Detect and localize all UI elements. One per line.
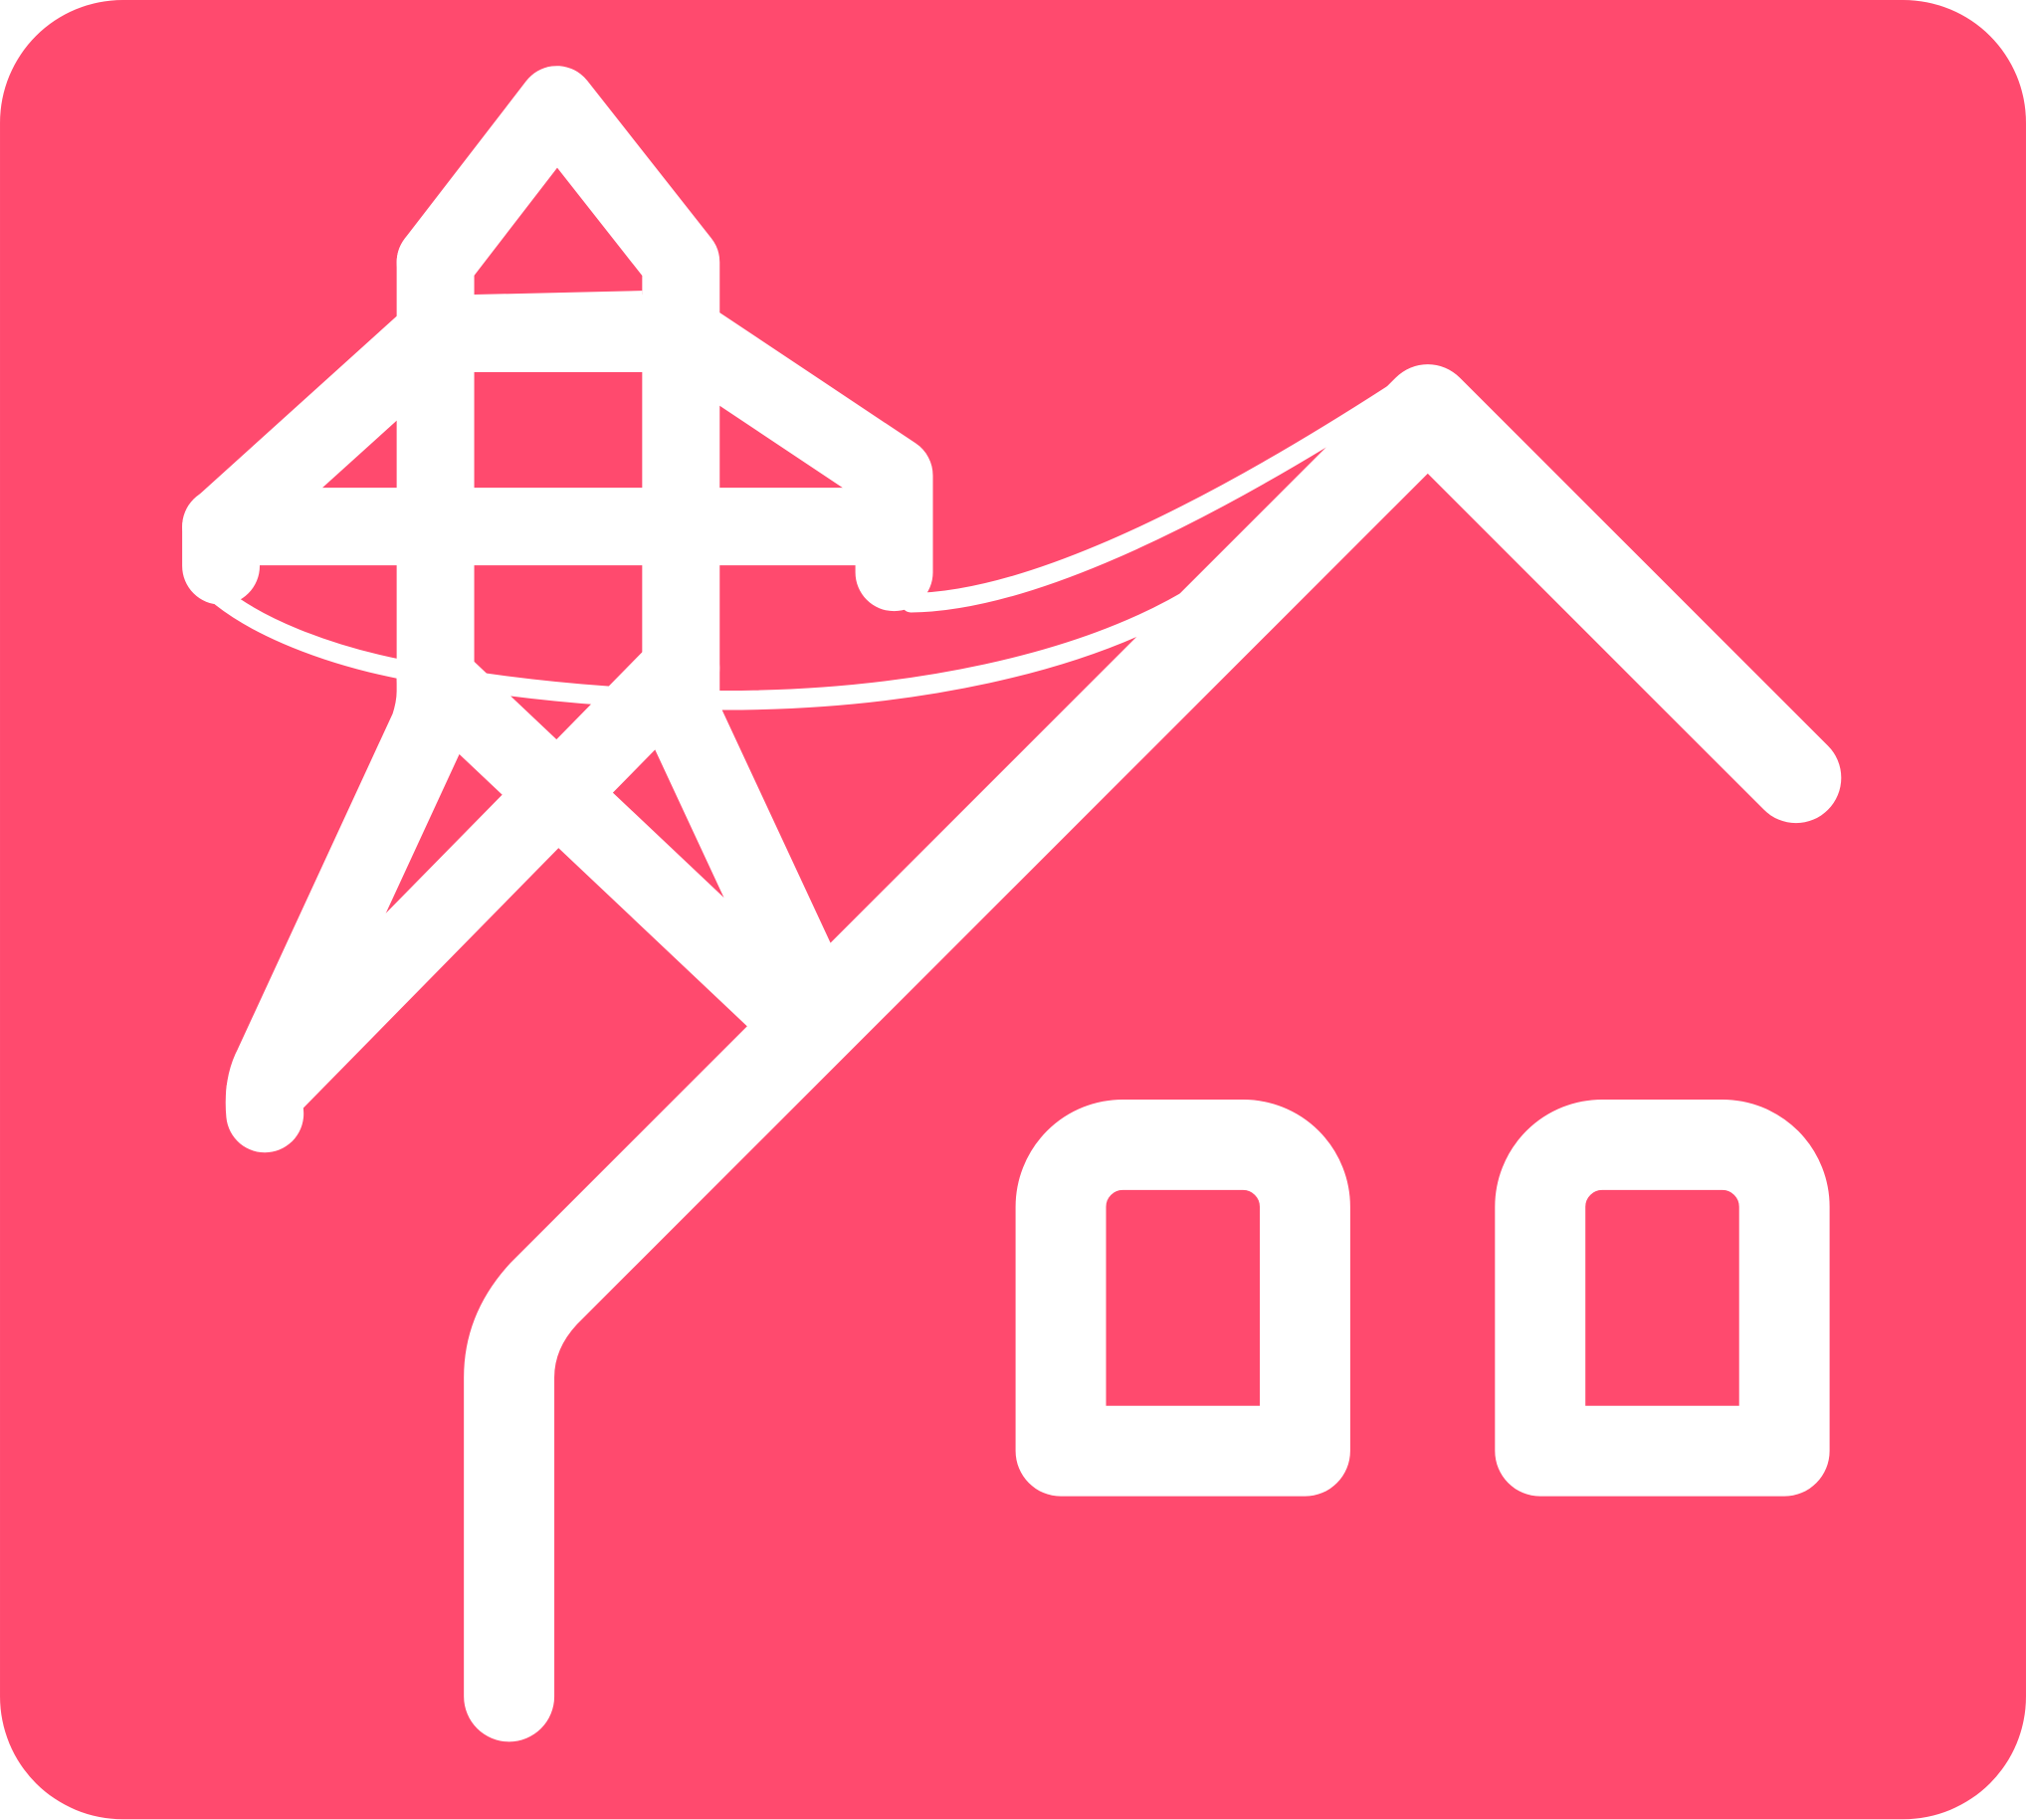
- icon: transmission tower: [221, 104, 895, 1113]
- icon: right window: [1540, 1144, 1784, 1451]
- icon: left window: [1061, 1144, 1305, 1451]
- icon: house roof and wall: [509, 410, 1796, 1697]
- icon: thin power wires: [221, 394, 1393, 701]
